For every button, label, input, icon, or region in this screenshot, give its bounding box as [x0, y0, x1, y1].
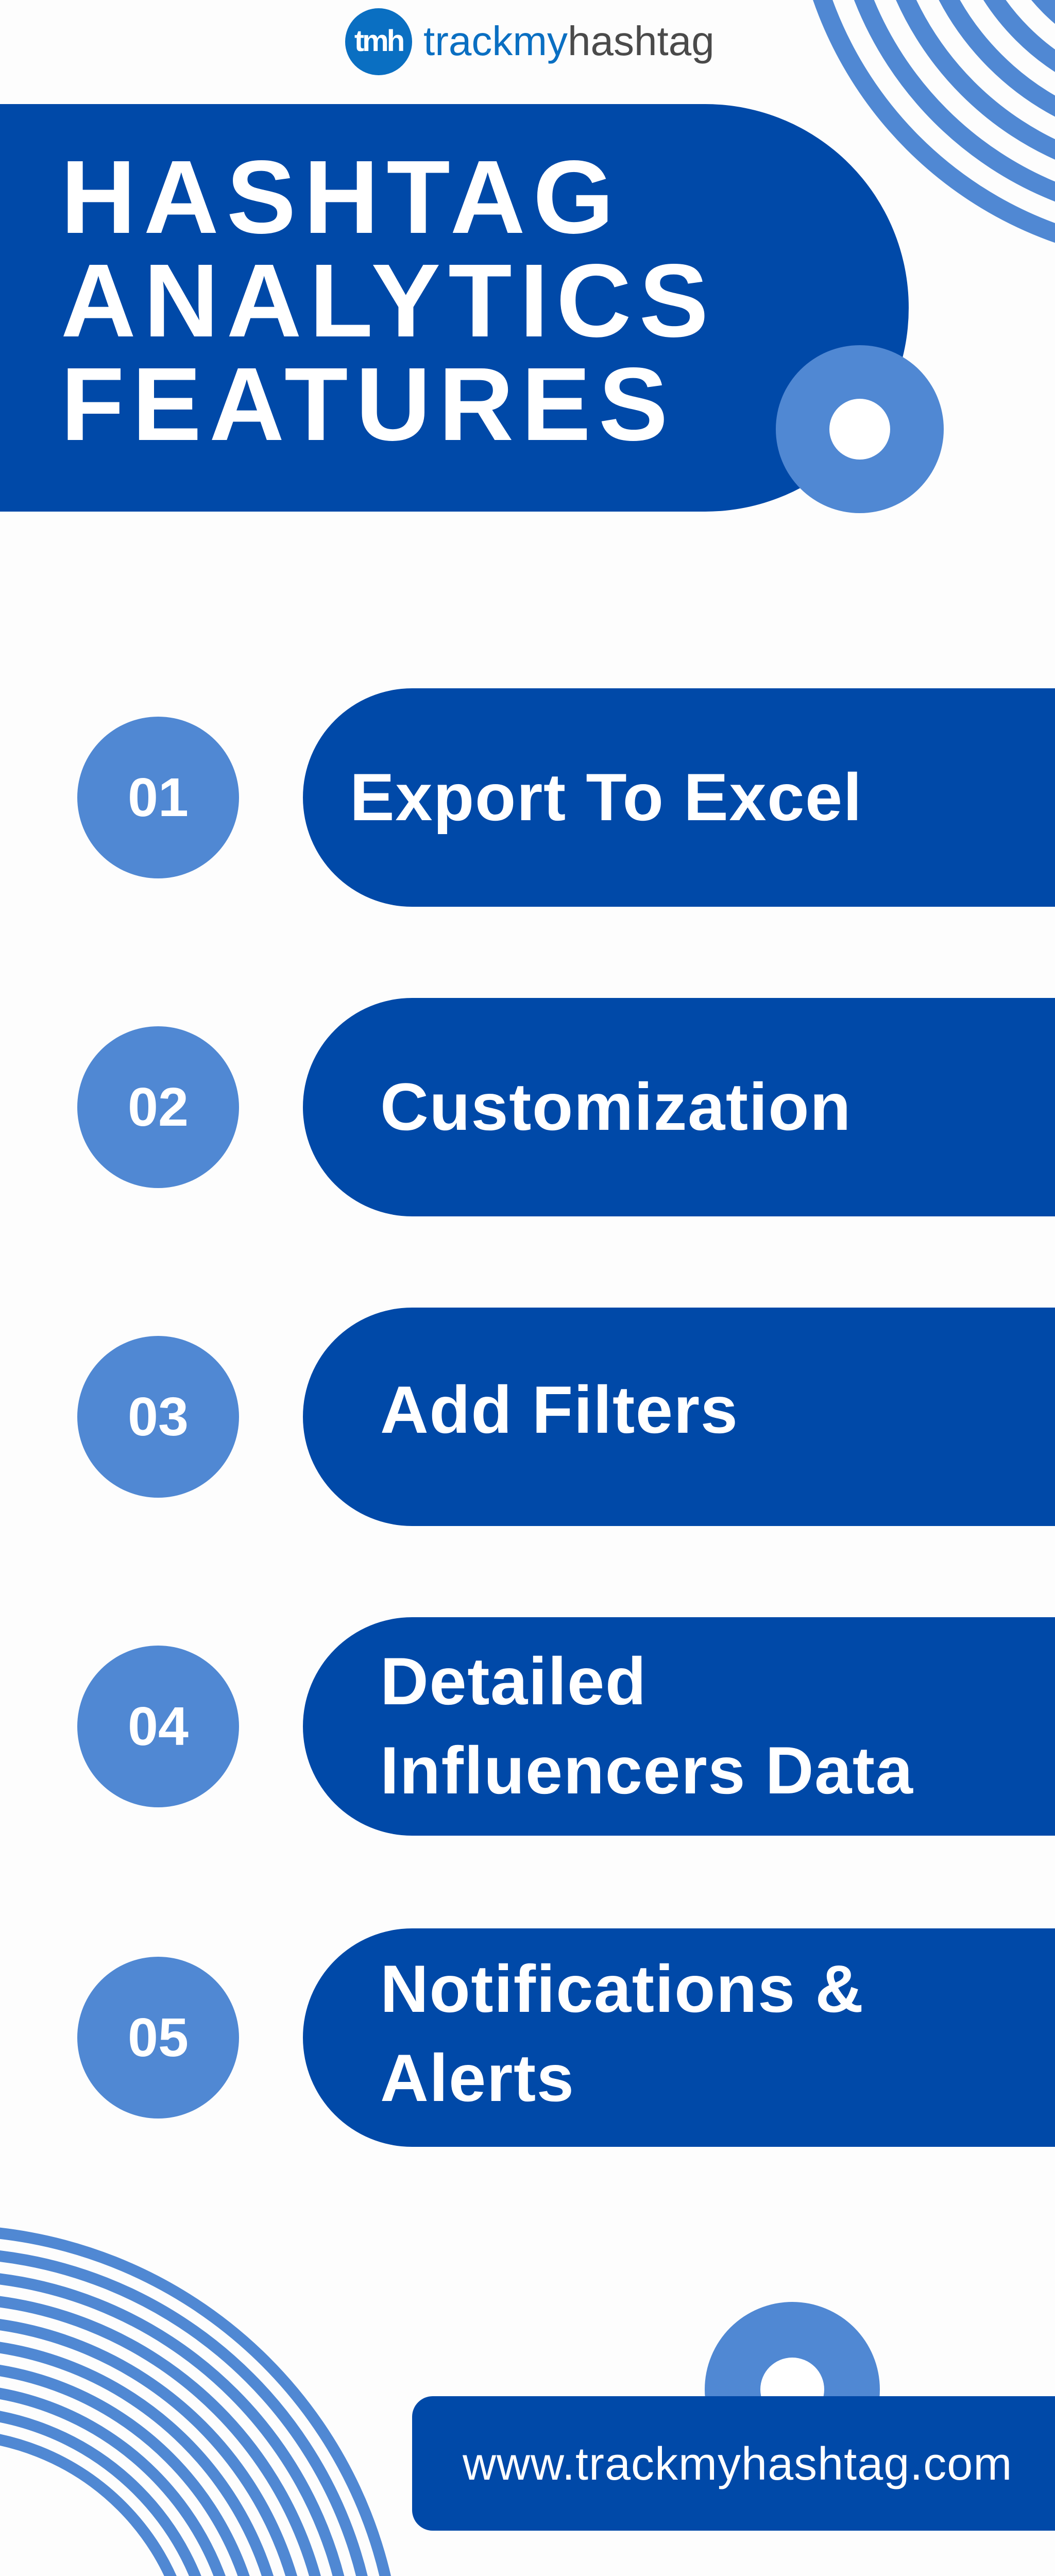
title banner: [0, 104, 909, 512]
item 5: [77, 1928, 1055, 2147]
pill: Export To Excel: Export To Excel: [350, 759, 862, 835]
pill: Customization: Customization: [380, 1069, 852, 1144]
icon: tmh circle: tmh: [354, 24, 403, 58]
item 1: [77, 688, 1055, 907]
logo: [345, 8, 714, 75]
item 4: [77, 1617, 1055, 1836]
number 05: 05: [128, 2007, 189, 2068]
number 02: [77, 1026, 239, 1188]
number 05: [77, 1957, 239, 2119]
number 04: 04: [128, 1696, 189, 1757]
decorative circle on banner: [776, 345, 944, 513]
pill: Detailed Influencers Data: Detailed: [380, 1643, 647, 1719]
number 03: [77, 1336, 239, 1498]
pill: Add Filters: [303, 1308, 1055, 1526]
title: FEATURES: [61, 346, 676, 462]
url box: [412, 2396, 1055, 2531]
item 2: [77, 998, 1055, 1216]
pill: Notifications & Alerts: [303, 1928, 1055, 2147]
number 01: 01: [128, 767, 189, 827]
pill: Notifications & Alerts: Notifications &: [380, 1951, 864, 2026]
number 04: [77, 1646, 239, 1807]
title: [61, 139, 716, 462]
number 03: 03: [128, 1386, 189, 1447]
pill: Notifications & Alerts: Alerts: [380, 2040, 574, 2115]
pill: Export To Excel: [303, 688, 1055, 907]
title: HASHTAG: [61, 139, 622, 255]
title: ANALYTICS: [61, 242, 716, 359]
url text: www.trackmyhashtag.com: [463, 2438, 1012, 2490]
pill: Add Filters: Add Filters: [380, 1372, 738, 1447]
number 02: 02: [128, 1077, 189, 1138]
pill: Customization: [303, 998, 1055, 1216]
pill: Detailed Influencers Data: [303, 1617, 1055, 1836]
number 01: [77, 717, 239, 878]
brand name: trackmyhashtag: [423, 18, 714, 64]
item 3: [77, 1308, 1055, 1526]
icon: tmh circle: [345, 8, 412, 75]
pill: Detailed Influencers Data: Influencers Data: [380, 1733, 913, 1808]
decorative circle above url: [705, 2302, 880, 2477]
